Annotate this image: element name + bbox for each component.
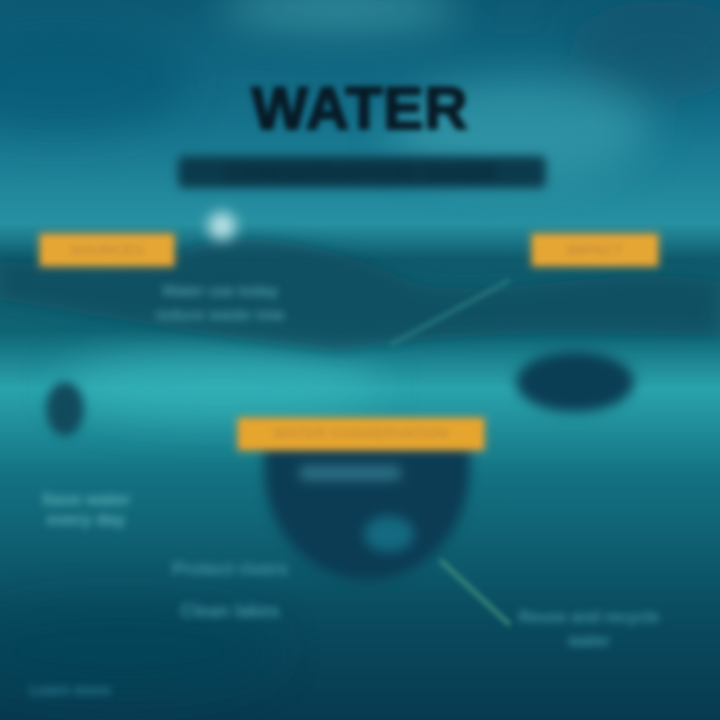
text block: lower right [516, 608, 660, 650]
text block: upper left: Water use today [162, 283, 278, 300]
text block: left [40, 490, 132, 530]
glow icon [208, 212, 236, 240]
circle: right [516, 352, 634, 412]
text block: lower right: Reuse and recycle [519, 609, 659, 626]
text block: lower right: water [568, 633, 610, 650]
text block: lower middle: Protect rivers [172, 559, 288, 579]
text block: lower middle: Clean lakes [180, 601, 280, 621]
circle teal spot [364, 516, 414, 552]
title: WATER [251, 75, 469, 142]
text block: upper left [154, 283, 286, 324]
text block: upper left: reduce waste now [156, 307, 284, 324]
text block: left: every day [47, 510, 125, 529]
label: right [534, 236, 656, 264]
icon: left drop [46, 382, 84, 436]
circle: centre [264, 440, 470, 580]
text block: lower middle [170, 559, 290, 621]
label: right: IMPACT [567, 242, 623, 259]
label: centre: WATER CONSERVATION [273, 425, 449, 442]
text block: bottom left: Learn more [29, 682, 111, 699]
subtitle: CONSERVATION GUIDE [226, 160, 498, 187]
label: left [42, 236, 172, 264]
text block: left: Save water [42, 490, 130, 509]
label: left: SOURCES [70, 242, 144, 259]
label: centre [240, 420, 482, 448]
subtitle [178, 156, 546, 188]
circle highlight [300, 466, 400, 480]
